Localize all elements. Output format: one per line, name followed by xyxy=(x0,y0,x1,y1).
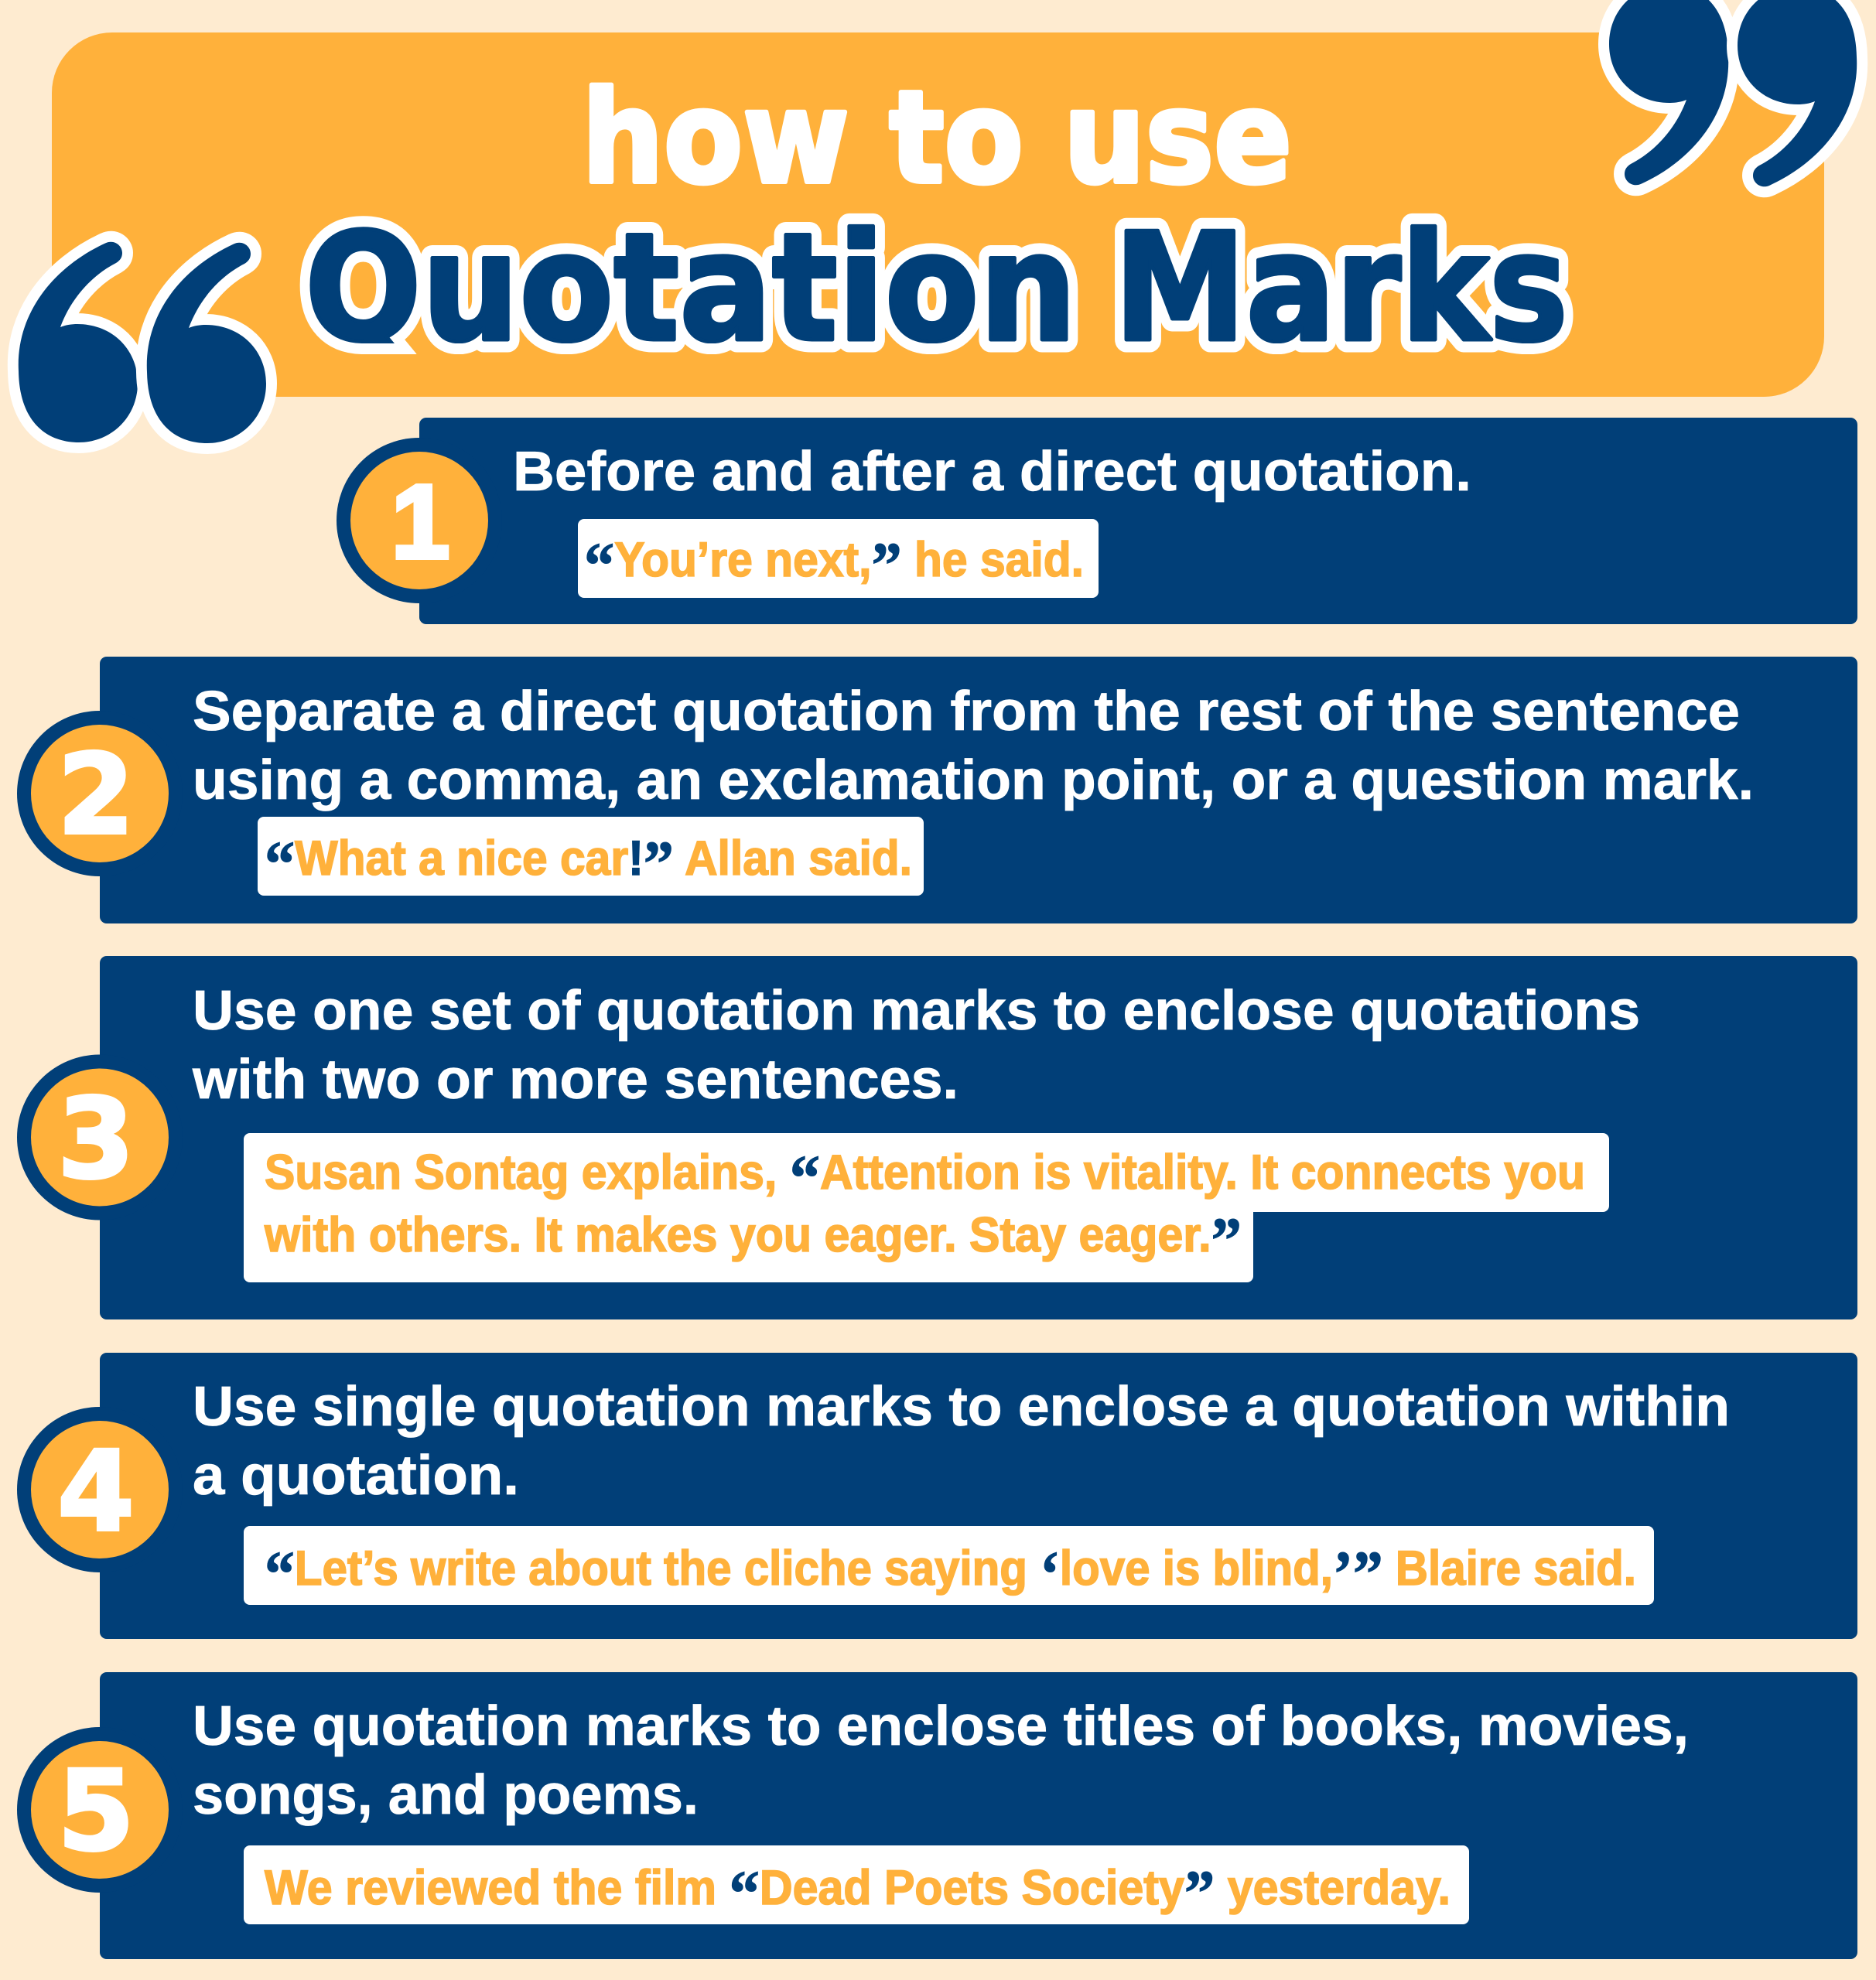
rule 2 example: ! xyxy=(628,831,644,886)
rule 1 example: he said. xyxy=(902,533,1084,587)
rule 2 text: Separate a direct quotation from the rest of the sentence xyxy=(193,681,1740,742)
panel: rule 2 xyxy=(17,657,1857,923)
number badge 3 xyxy=(17,1055,183,1220)
number badge 2 xyxy=(17,711,183,876)
rule 5 example: Dead Poets Society xyxy=(760,1861,1184,1915)
rule 2 example xyxy=(258,817,924,900)
rule 4 example xyxy=(244,1526,1654,1610)
number badge 5: 5 xyxy=(57,1746,135,1876)
panel: rule 1 xyxy=(337,418,1857,624)
rule 2 example: Allan said. xyxy=(674,831,912,886)
panel: rule 5 xyxy=(17,1672,1857,1959)
rule 4 example: Blaire said. xyxy=(1383,1541,1636,1596)
rule 1 example xyxy=(578,519,1099,602)
rule 3 example: “ xyxy=(790,1142,820,1214)
rule 4 text: Use single quotation marks to enclose a quotation within xyxy=(193,1376,1730,1438)
rule 4 text: a quotation. xyxy=(193,1445,519,1507)
icon: opening quotation mark xyxy=(19,242,266,443)
rule 3 example: ” xyxy=(1211,1205,1242,1277)
rule 3 example: Susan Sontag explains, xyxy=(265,1145,812,1200)
number badge 4 xyxy=(17,1407,183,1572)
rule 5 text: songs, and poems. xyxy=(193,1764,699,1826)
rule 5 example: “ xyxy=(729,1858,760,1930)
number badge 5 xyxy=(17,1727,183,1893)
title: Quotation Marks xyxy=(300,213,1574,354)
number badge 1 xyxy=(337,438,502,603)
icon: closing quotation mark xyxy=(1609,0,1857,186)
title: Quotation Marks: Quotation xyxy=(305,201,1077,375)
title: Quotation Marks: Marks xyxy=(1114,201,1568,375)
rule 2 example: “ xyxy=(265,828,295,900)
number badge 3: 3 xyxy=(57,1074,135,1203)
number badge 4: 4 xyxy=(57,1427,135,1556)
rule 5 example: yesterday. xyxy=(1215,1861,1451,1915)
rule 4 example: ’” xyxy=(1333,1538,1383,1610)
rule 2 text xyxy=(193,681,1754,811)
rule 3 example: with others. It makes you eager. Stay eager. xyxy=(265,1208,1273,1262)
rule 3 example: Attention is vitality. It connects you xyxy=(820,1145,1585,1200)
rule 2 text: using a comma, an exclamation point, or a question mark. xyxy=(193,749,1754,811)
rule 4 example: love is blind, xyxy=(1060,1541,1333,1596)
title: how to use: how to use xyxy=(582,63,1292,212)
rule 1 example: ” xyxy=(871,530,902,602)
panel: rule 3 xyxy=(17,956,1857,1319)
title: Quotation Marks: Quotation xyxy=(305,201,1077,375)
rule 4 example: Let’s write about the cliche saying xyxy=(295,1541,1040,1596)
rule 3 text: with two or more sentences. xyxy=(192,1049,959,1111)
panel: rule 4 xyxy=(17,1353,1857,1639)
rule 3 text xyxy=(192,980,1640,1111)
rule 5 example xyxy=(244,1845,1469,1930)
rule 4 text xyxy=(193,1376,1730,1507)
rule 1 example: “ xyxy=(584,530,614,602)
number badge 1: 1 xyxy=(391,463,449,580)
rule 5 example: ” xyxy=(1184,1858,1215,1930)
rule 4 example: ‘ xyxy=(1040,1538,1060,1610)
rule 3 text: Use one set of quotation marks to enclose quotations xyxy=(193,980,1640,1042)
title: Quotation Marks: Marks xyxy=(1114,201,1568,375)
rule 4 example: “ xyxy=(265,1538,295,1610)
number badge 2: 2 xyxy=(57,730,135,859)
rule 3 example xyxy=(244,1133,1609,1282)
rule 1 text: Before and after a direct quotation. xyxy=(513,441,1471,503)
rule 5 example: We reviewed the film xyxy=(265,1861,746,1915)
header banner xyxy=(52,32,1824,397)
rule 2 example: ” xyxy=(644,828,674,900)
rule 1 example: You’re next, xyxy=(614,533,871,587)
rule 5 text: Use quotation marks to enclose titles of books, movies, xyxy=(193,1695,1689,1757)
rule 5 text xyxy=(193,1695,1689,1826)
rule 2 example: What a nice car xyxy=(295,831,628,886)
